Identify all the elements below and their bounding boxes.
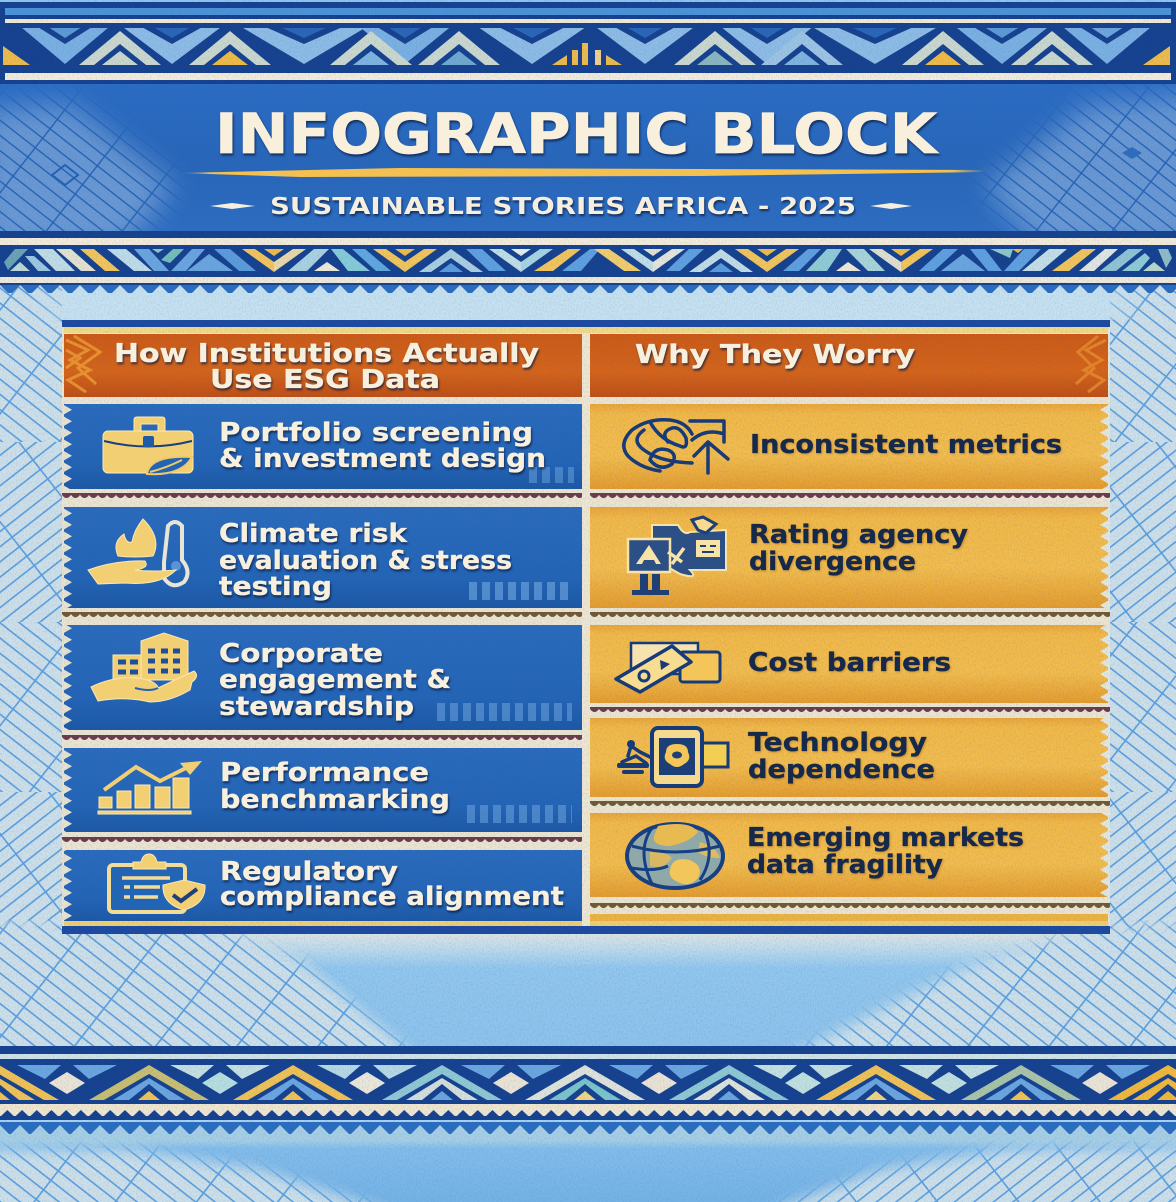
heading: why they worry: Why They Worry <box>635 340 915 370</box>
label: & investment design <box>219 444 546 474</box>
row: cost barriers <box>616 643 951 692</box>
table frame <box>62 320 1110 934</box>
label <box>748 728 935 785</box>
label: Technology <box>748 728 927 758</box>
icon: globe <box>627 824 723 888</box>
top ornamental border <box>0 2 1176 97</box>
label <box>220 857 564 912</box>
label: evaluation & stress <box>219 546 512 576</box>
icon: hand holding buildings <box>91 633 197 702</box>
icon: rating sign boards <box>628 517 726 595</box>
label: divergence <box>749 547 916 577</box>
label: stewardship <box>219 692 414 722</box>
label: Performance <box>220 758 429 788</box>
label <box>749 520 968 577</box>
label <box>219 519 512 602</box>
label: Inconsistent metrics <box>750 430 1062 460</box>
icon: tablet and robot <box>617 728 728 786</box>
label <box>219 639 451 722</box>
label: Regulatory <box>220 857 398 887</box>
heading: how institutions actually use ESG data: How Institutions Actually <box>114 339 539 369</box>
label: testing <box>219 572 332 602</box>
label: dependence <box>748 755 935 785</box>
row: rating agency divergence <box>628 517 968 595</box>
panel: right rows <box>590 404 1110 921</box>
title: INFOGRAPHIC BLOCK <box>215 102 940 166</box>
label <box>220 758 450 815</box>
bottom ornamental border <box>0 1046 1176 1134</box>
label: data fragility <box>747 850 943 880</box>
icon: flame, thermometer and hand <box>88 519 188 585</box>
label: Emerging markets <box>747 823 1024 853</box>
label: Portfolio screening <box>219 418 533 448</box>
label: Cost barriers <box>748 648 951 678</box>
label: benchmarking <box>220 785 450 815</box>
icon: clipboard with shield <box>109 854 205 912</box>
subtitle: SUSTAINABLE STORIES AFRICA - 2025 <box>270 194 856 220</box>
label <box>747 823 1024 880</box>
panel: column header right <box>590 334 1108 397</box>
heading: how institutions actually use ESG data: Use ESG Data <box>210 365 440 395</box>
label: Corporate <box>219 639 383 669</box>
label: engagement & <box>219 665 451 695</box>
icon: briefcase with leaf <box>103 417 193 474</box>
icon: rising bar chart <box>98 761 202 814</box>
row: corporate engagement <box>91 633 451 722</box>
lower header ornamental border <box>0 231 1176 293</box>
row: inconsistent metrics <box>624 420 1062 473</box>
label <box>219 418 546 474</box>
icon: banknotes and ticket <box>616 643 720 692</box>
row: portfolio screening <box>103 417 546 474</box>
title underline <box>178 168 985 177</box>
row: regulatory compliance <box>109 854 564 912</box>
row: technology dependence <box>617 728 935 786</box>
icon: tangled metrics and arrow <box>624 420 728 473</box>
row: emerging markets <box>627 823 1024 888</box>
subtitle <box>210 194 912 220</box>
row: performance benchmarking <box>98 758 450 815</box>
label: Rating agency <box>749 520 968 550</box>
row: climate risk <box>88 519 512 602</box>
panel: column header left <box>64 334 582 397</box>
label: Climate risk <box>219 519 408 549</box>
panel: left rows <box>62 404 582 921</box>
heading: how institutions actually use ESG data <box>114 339 539 395</box>
header banner <box>0 84 1176 232</box>
label: compliance alignment <box>220 882 564 912</box>
